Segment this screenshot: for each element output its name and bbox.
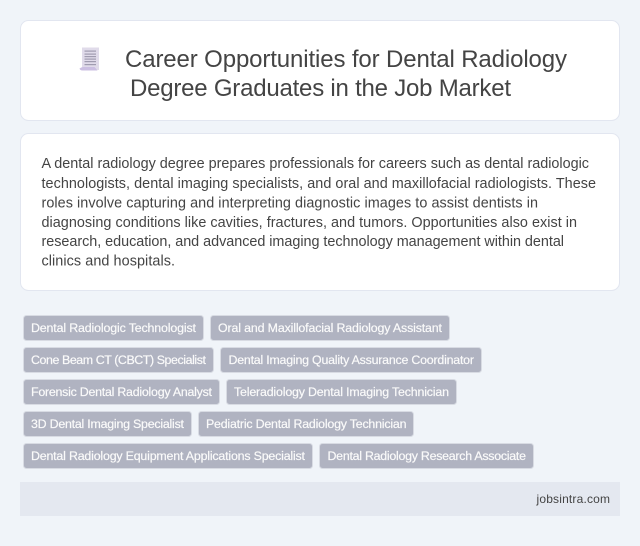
tag: Oral and Maxillofacial Radiology Assistant bbox=[218, 321, 443, 335]
tag bbox=[24, 348, 214, 372]
tag: Teleradiology Dental Imaging Technician bbox=[234, 385, 449, 399]
tag bbox=[210, 316, 450, 340]
tag: Dental Radiology Research Associate bbox=[328, 449, 526, 463]
text block: description: diagnosing conditions like cavities, fractures, and tumors. Opportunities also exist in bbox=[42, 215, 577, 231]
footer: jobsintra.com bbox=[536, 492, 610, 506]
tag bbox=[24, 380, 220, 404]
text block: description bbox=[42, 156, 596, 270]
tag bbox=[226, 380, 456, 404]
text block: description: roles involve capturing and interpreting diagnostic images to assist dentists in bbox=[42, 196, 538, 212]
title: Degree Graduates in the Job Market bbox=[130, 75, 511, 102]
text block: description: clinics and hospitals. bbox=[42, 254, 175, 270]
tag list: career roles bbox=[24, 316, 534, 468]
tag bbox=[220, 348, 482, 372]
tag: Dental Radiologic Technologist bbox=[31, 321, 197, 335]
tag: 3D Dental Imaging Specialist bbox=[31, 417, 185, 431]
tag: Cone Beam CT (CBCT) Specialist bbox=[31, 353, 207, 367]
tag: Dental Imaging Quality Assurance Coordinator bbox=[228, 353, 474, 367]
tag: Dental Radiology Equipment Applications Specialist bbox=[31, 449, 306, 463]
text block: description: technologists, dental imaging specialists, and oral and maxillofacial radiologists. These bbox=[42, 176, 596, 192]
footer bbox=[20, 482, 620, 516]
tag bbox=[320, 444, 534, 468]
title bbox=[125, 46, 567, 102]
text block: description: A dental radiology degree prepares professionals for careers such as dental radiologic bbox=[42, 156, 589, 172]
title: Career Opportunities for Dental Radiology bbox=[125, 46, 567, 73]
tag bbox=[24, 444, 312, 468]
icon: document scroll bbox=[80, 48, 99, 70]
panel: description card bbox=[20, 134, 620, 290]
tag bbox=[24, 412, 192, 436]
panel: title card bbox=[20, 20, 620, 120]
tag: Forensic Dental Radiology Analyst bbox=[31, 385, 213, 399]
tag bbox=[198, 412, 414, 436]
text block: description: research, education, and advanced imaging technology management within dental bbox=[42, 234, 564, 250]
tag: Pediatric Dental Radiology Technician bbox=[206, 417, 407, 431]
tag bbox=[24, 316, 204, 340]
